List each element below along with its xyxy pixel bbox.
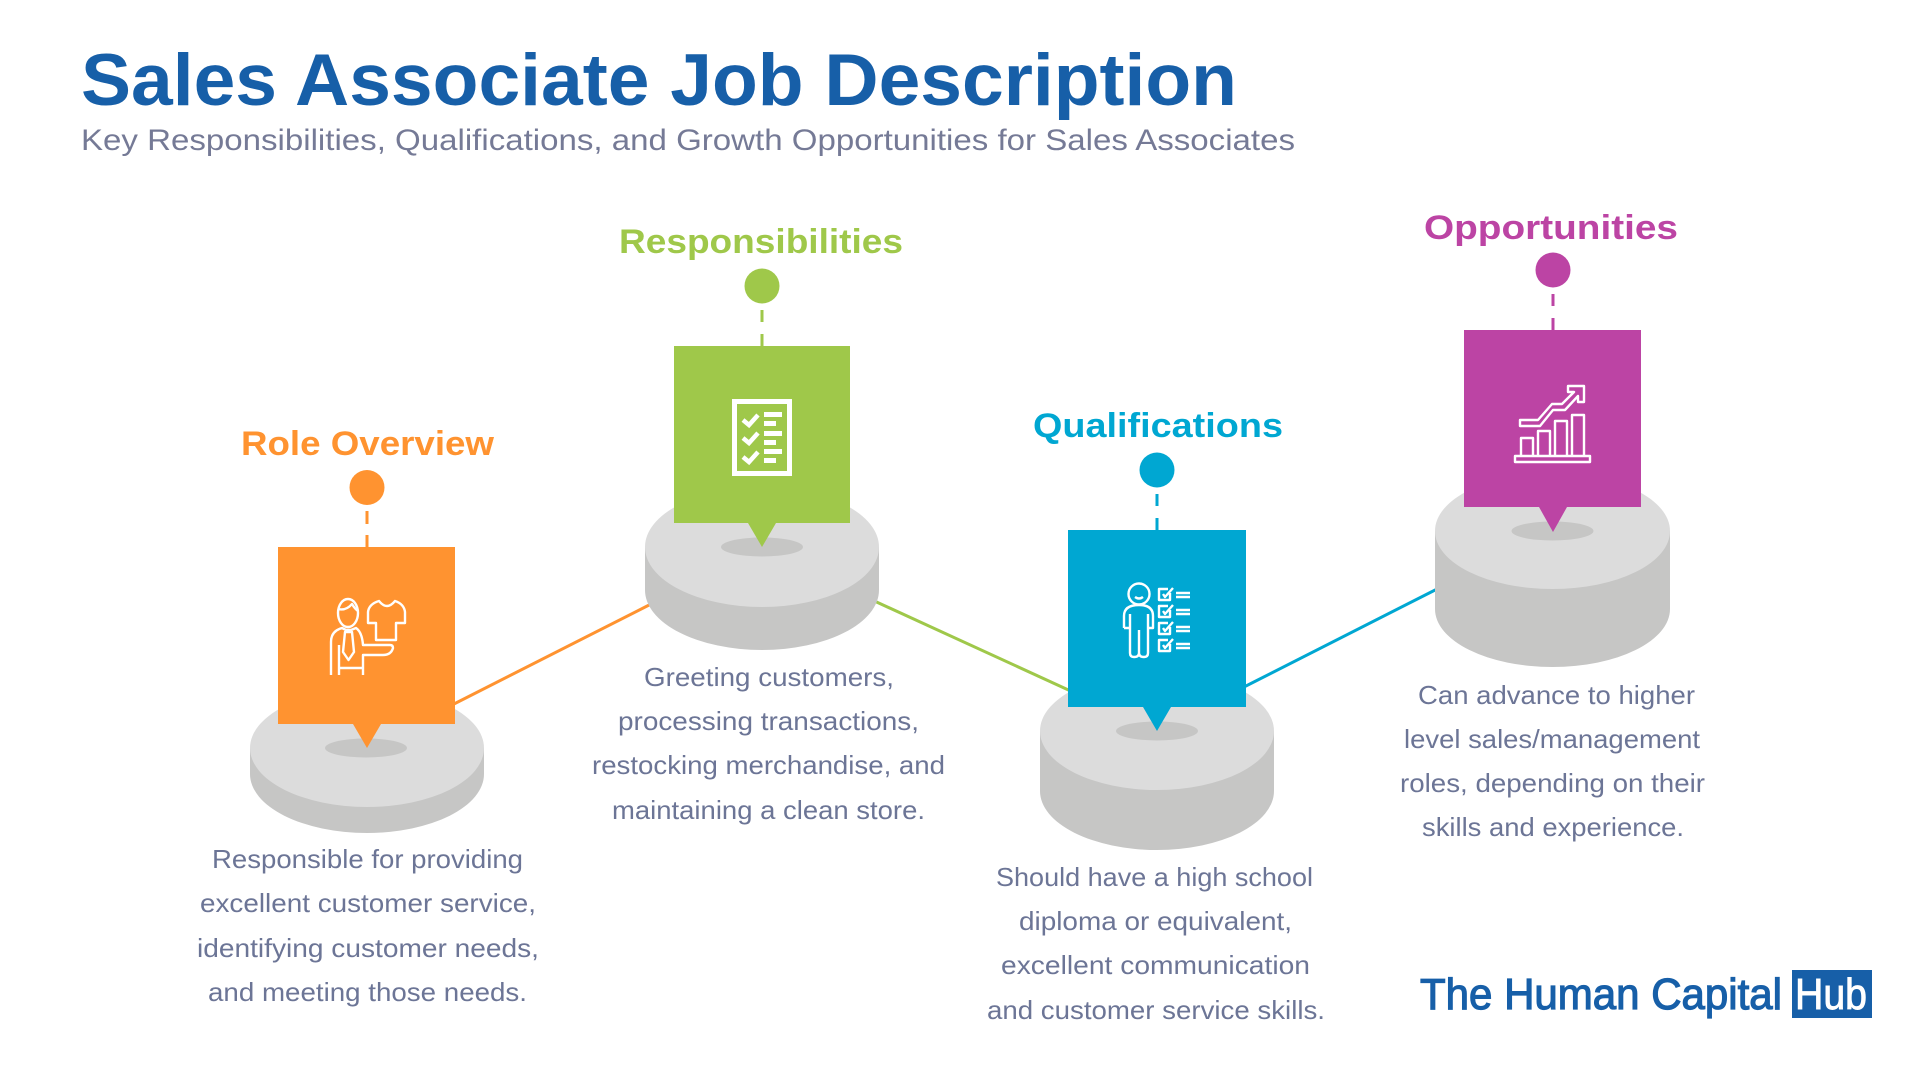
subtitle: Key Responsibilities, Qualifications, and Growth Opportunities for Sales Associates bbox=[81, 124, 1295, 157]
description: responsibilities: maintaining a clean store. bbox=[612, 795, 925, 825]
heading: responsibilities: Responsibilities bbox=[619, 223, 903, 261]
description: opportunities: level sales/management bbox=[1404, 724, 1701, 754]
logo: The Human Capital Hub: Hub bbox=[1795, 970, 1867, 1019]
purple pin card bbox=[1464, 330, 1641, 532]
panel: responsibilities bbox=[592, 223, 945, 825]
description: qualifications: diploma or equivalent, bbox=[1019, 906, 1292, 936]
icon: salesperson with shirt bbox=[331, 599, 405, 675]
description: responsibilities: Greeting customers, bbox=[644, 662, 894, 692]
description: qualifications bbox=[987, 862, 1325, 1025]
description: responsibilities: processing transactions, bbox=[618, 706, 919, 736]
panel: qualifications bbox=[987, 407, 1325, 1025]
pedestal bbox=[1040, 672, 1274, 850]
heading: role overview: Role Overview bbox=[241, 425, 495, 463]
description: role overview: identifying customer needs, bbox=[197, 933, 539, 963]
icon: rising bar chart bbox=[1515, 386, 1590, 462]
blue pin card bbox=[1068, 530, 1246, 731]
description: role overview: excellent customer service, bbox=[200, 888, 536, 918]
description: role overview: Responsible for providing bbox=[212, 844, 523, 874]
marker dot with dashed stem bbox=[350, 470, 384, 548]
description: role overview bbox=[197, 844, 539, 1007]
description: opportunities bbox=[1400, 680, 1705, 842]
description: qualifications: Should have a high school bbox=[996, 862, 1313, 892]
pedestal bbox=[645, 487, 879, 650]
description: responsibilities: restocking merchandise, and bbox=[592, 750, 945, 780]
heading: qualifications: Qualifications bbox=[1033, 407, 1283, 445]
description: opportunities: Can advance to higher bbox=[1418, 680, 1695, 710]
description: role overview: and meeting those needs. bbox=[208, 977, 527, 1007]
description: qualifications: excellent communication bbox=[1001, 950, 1310, 980]
connector lines between steps bbox=[450, 585, 1445, 706]
icon: checklist bbox=[734, 402, 790, 474]
marker dot with dashed stem bbox=[744, 268, 780, 347]
panel: role overview bbox=[197, 425, 539, 1007]
logo: The Human Capital Hub: The Human Capital bbox=[1420, 970, 1782, 1019]
icon: person with checklist bbox=[1124, 584, 1190, 657]
pedestal bbox=[1435, 473, 1670, 667]
description: responsibilities bbox=[592, 662, 945, 825]
pedestal bbox=[250, 689, 484, 833]
description: qualifications: and customer service skills. bbox=[987, 995, 1325, 1025]
heading: opportunities: Opportunities bbox=[1424, 209, 1678, 247]
panel: opportunities bbox=[1400, 209, 1705, 842]
orange pin card bbox=[278, 547, 455, 748]
marker dot with dashed stem bbox=[1140, 452, 1174, 531]
description: opportunities: roles, depending on their bbox=[1400, 768, 1705, 798]
marker dot with dashed stem bbox=[1536, 252, 1570, 331]
title: Sales Associate Job Description bbox=[81, 40, 1237, 121]
green pin card bbox=[674, 346, 850, 547]
description: opportunities: skills and experience. bbox=[1422, 812, 1684, 842]
